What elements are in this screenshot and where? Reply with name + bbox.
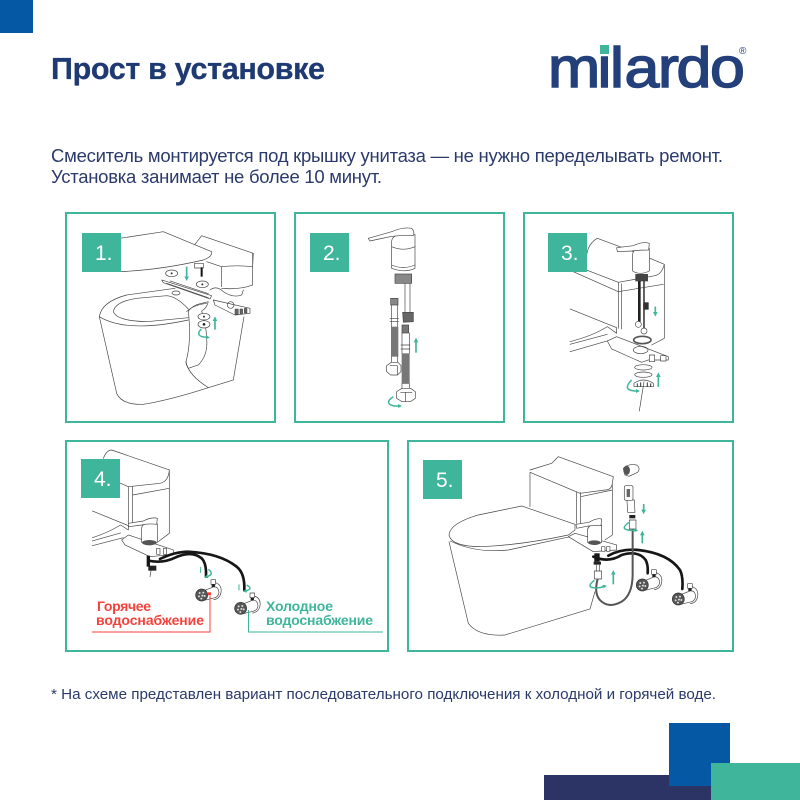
panel: step 1 (66, 213, 275, 422)
label: cold water: водоснабжение (266, 612, 373, 628)
illustration: faucet and hoses (368, 228, 416, 406)
logo: milardo: milardo (548, 36, 745, 99)
badge: step 5: 5. (436, 469, 454, 492)
illustration: faucet mounted in cistern (570, 238, 668, 411)
illustration: connecting to water supply (92, 450, 260, 614)
panel: step 5 (408, 441, 733, 651)
corner blocks: bottom right (544, 723, 800, 800)
label: hot water: водоснабжение (96, 612, 204, 628)
badge: step 4: 4. (94, 468, 112, 491)
label: hot water (92, 596, 210, 632)
badge: step 2 (310, 233, 349, 272)
intro text: Смеситель монтируется под крышку унитаза — не нужно переделывать ремонт. (51, 145, 723, 166)
badge: step 1: 1. (95, 242, 113, 265)
label: cold water (248, 598, 383, 632)
intro text (51, 145, 723, 187)
label: hot water: Горячее (97, 598, 151, 614)
illustration: toilet mounting (99, 232, 253, 404)
badge: step 1 (82, 233, 121, 272)
intro text: Установка занимает не более 10 минут. (51, 166, 382, 187)
title: Прост в установке (51, 52, 325, 86)
illustration: complete assembly with hygienic shower (449, 457, 698, 635)
badge: step 3: 3. (561, 242, 579, 265)
badge: step 4 (81, 459, 120, 498)
badge: step 3 (548, 233, 587, 272)
badge: step 5 (423, 460, 462, 499)
panel: step 3 (524, 213, 733, 422)
panel: step 2 (295, 213, 504, 422)
badge: step 2: 2. (323, 242, 341, 265)
corner square: top left (0, 0, 33, 33)
footnote: * На схеме представлен вариант последовательного подключения к холодной и горячей воде. (51, 686, 716, 703)
panel: step 4 (66, 441, 388, 651)
label: cold water: Холодное (266, 598, 333, 614)
logo: milardo: ® (739, 46, 747, 57)
